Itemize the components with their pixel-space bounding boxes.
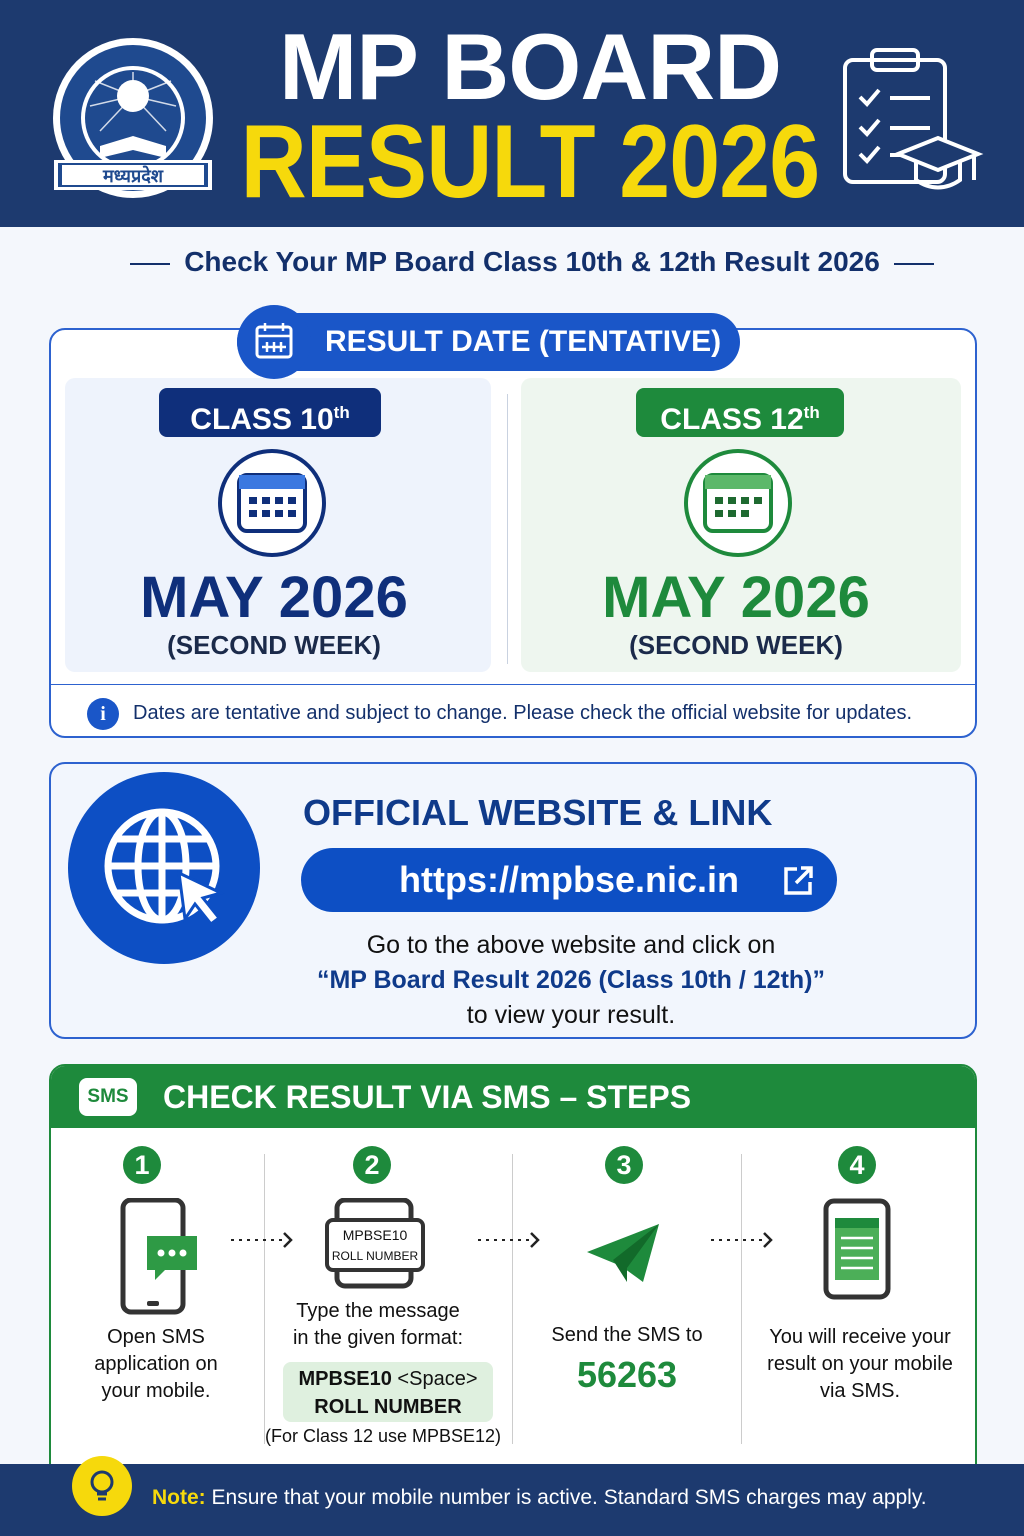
icon: calendar <box>237 305 311 379</box>
panel: sms steps <box>49 1064 977 1484</box>
arrow 3 <box>711 1232 773 1248</box>
title: RESULT 2026 <box>241 104 819 220</box>
logo: मध्यप्रदेश <box>102 165 164 186</box>
panel: official website <box>49 762 977 1039</box>
step 2: (For Class 12 use MPBSE12) <box>265 1426 501 1446</box>
step 3: Send the SMS to <box>551 1324 703 1346</box>
heading: OFFICIAL WEBSITE & LINK <box>303 792 772 833</box>
step 2: 2 <box>364 1150 380 1180</box>
step 2 <box>265 1146 501 1446</box>
icon: clipboard <box>843 48 984 190</box>
header bar <box>51 1066 979 1128</box>
info note: Dates are tentative and subject to change. Please check the official website for updates. <box>133 702 912 724</box>
icon: sms: SMS <box>87 1086 129 1107</box>
step 3 <box>551 1146 703 1395</box>
step 2: Type the message <box>296 1300 460 1322</box>
title <box>241 14 819 220</box>
tab: result date: RESULT DATE (TENTATIVE) <box>325 325 721 358</box>
step 1: application on <box>94 1353 218 1375</box>
footer note: Note: Ensure that your mobile number is active. Standard SMS charges may apply. <box>152 1486 927 1509</box>
date text: MAY 2026 <box>602 565 870 630</box>
class 12 label <box>636 388 844 437</box>
info note: i <box>100 703 106 725</box>
title: MP BOARD <box>279 14 781 119</box>
icon: calendar blue <box>218 449 326 557</box>
step 4: You will receive your <box>769 1326 951 1348</box>
step 2: MPBSE10 <Space> <box>298 1368 478 1390</box>
class 10 label: CLASS 10th <box>190 403 350 436</box>
arrow 2 <box>478 1232 540 1248</box>
step 2: in the given format: <box>293 1327 463 1349</box>
right card <box>521 378 961 672</box>
step 1: 1 <box>134 1150 150 1180</box>
step 2: MPBSE10 <box>343 1227 408 1243</box>
arrow 1 <box>231 1232 293 1248</box>
logo <box>53 38 213 198</box>
step 1: your mobile. <box>102 1380 210 1402</box>
step 4: 4 <box>849 1150 865 1180</box>
step 4: result on your mobile <box>767 1353 953 1375</box>
header <box>0 0 1024 227</box>
step 4 <box>767 1146 953 1402</box>
icon: bulb <box>72 1456 132 1516</box>
step 2: ROLL NUMBER <box>332 1249 418 1263</box>
tab: result date <box>237 313 740 371</box>
step 3: 56263 <box>577 1354 677 1395</box>
panel: result date <box>49 328 977 738</box>
url pill <box>301 848 837 912</box>
step 4: via SMS. <box>820 1380 900 1402</box>
date text: MAY 2026 <box>140 565 408 630</box>
left card: (SECOND WEEK) <box>167 630 381 660</box>
step 3: 3 <box>616 1150 632 1180</box>
instructions <box>317 931 825 1029</box>
instructions: Go to the above website and click on <box>367 931 775 959</box>
step 1 <box>94 1146 218 1402</box>
instructions: to view your result. <box>467 1001 675 1029</box>
subtitle: Check Your MP Board Class 10th & 12th Result 2026 <box>184 246 880 277</box>
class 10 label <box>159 388 381 437</box>
instructions: “MP Board Result 2026 (Class 10th / 12th)” <box>317 966 825 994</box>
info note <box>87 698 912 730</box>
header bar: CHECK RESULT VIA SMS – STEPS <box>163 1079 691 1115</box>
url pill: https://mpbse.nic.in <box>399 859 739 900</box>
footer note <box>0 1464 1024 1536</box>
icon: globe <box>68 772 260 964</box>
left card <box>65 378 491 672</box>
icon: calendar green <box>684 449 792 557</box>
step 2: ROLL NUMBER <box>314 1396 462 1418</box>
icon: sms <box>79 1078 137 1116</box>
right card: (SECOND WEEK) <box>629 630 843 660</box>
step 1: Open SMS <box>107 1326 205 1348</box>
class 12 label: CLASS 12th <box>660 403 820 436</box>
